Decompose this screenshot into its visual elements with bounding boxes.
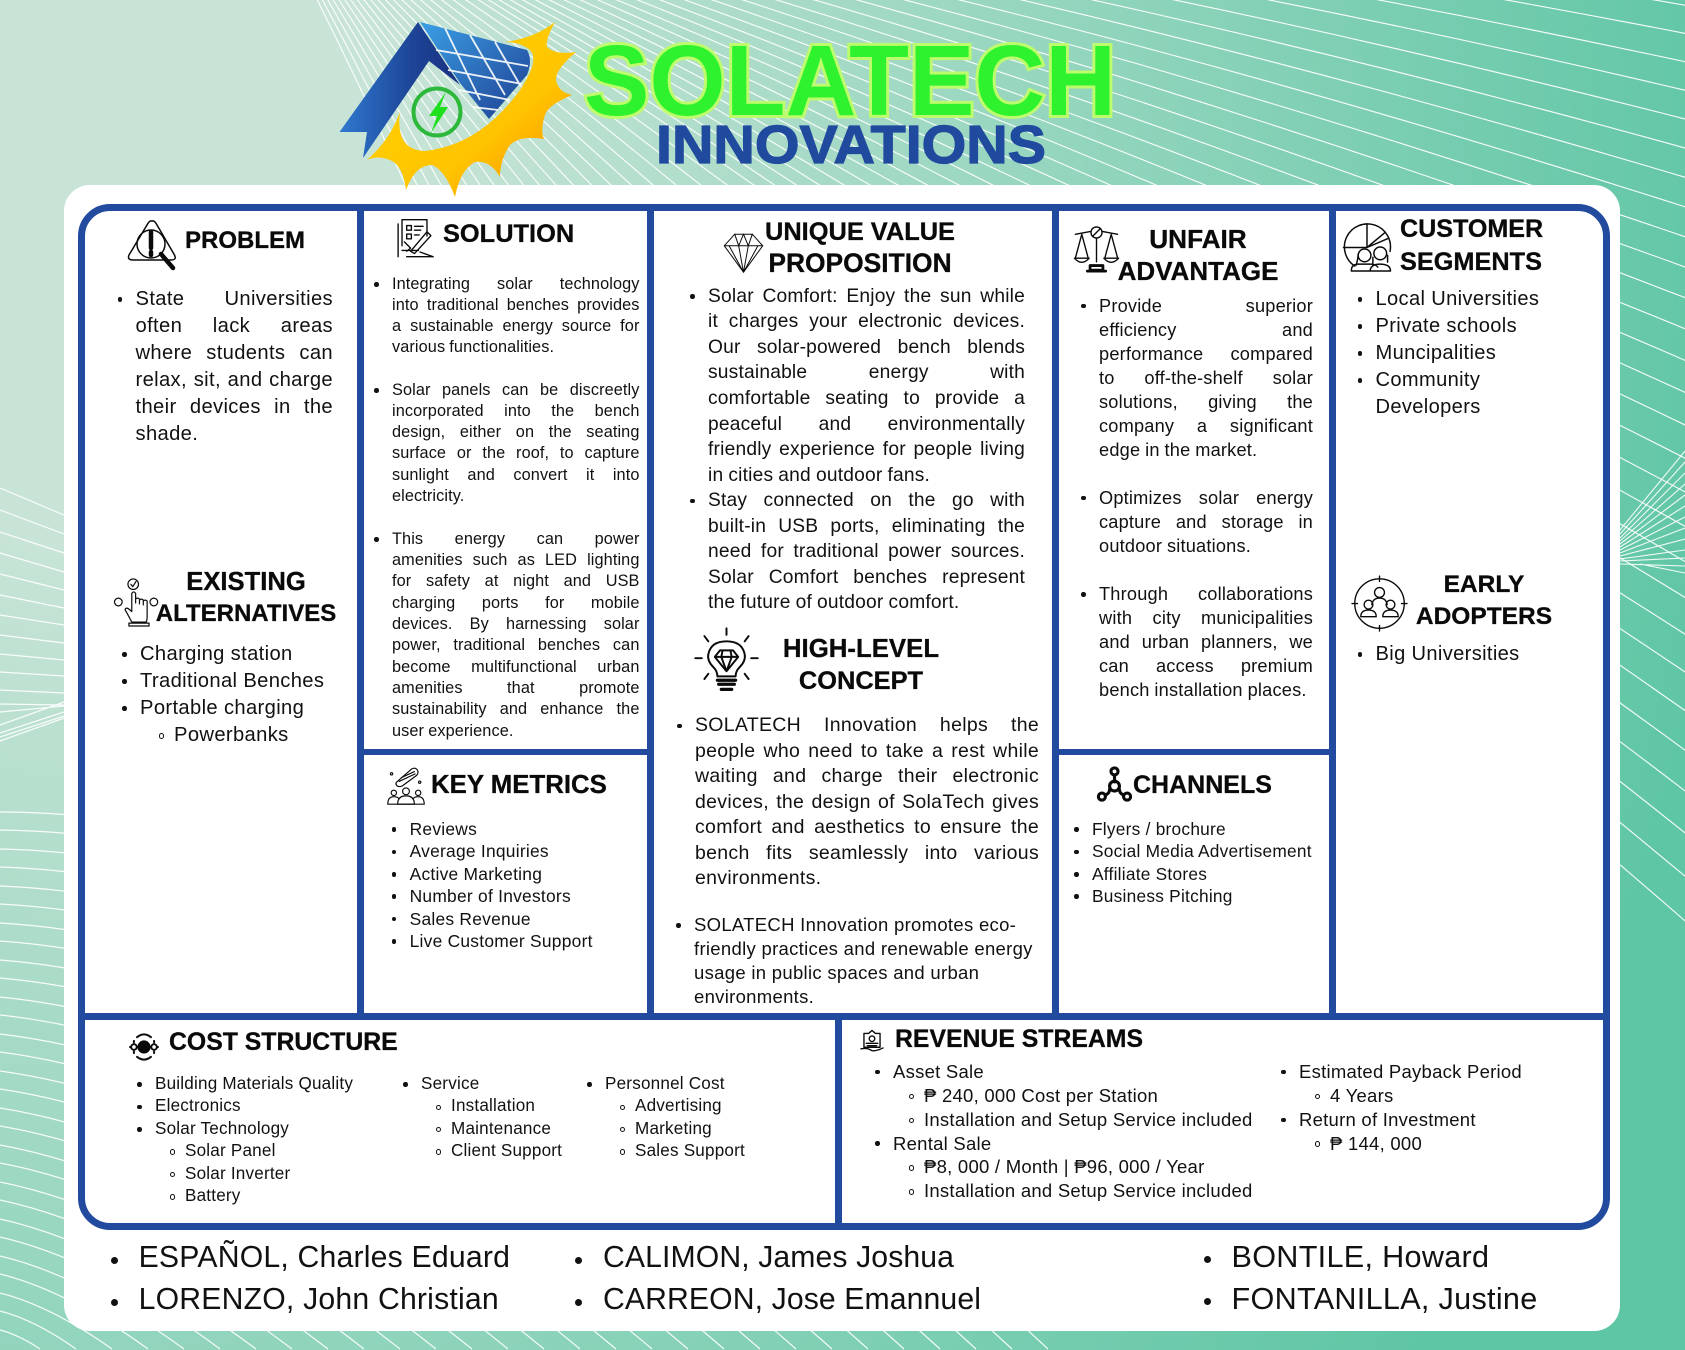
list [1358, 288, 1539, 418]
text block 1: solutions, giving the [1099, 392, 1313, 412]
panel: problem [118, 220, 333, 445]
list: Big Universities [1376, 643, 1520, 665]
list column 2: Maintenance [451, 1119, 551, 1138]
list column 1: Battery [185, 1186, 241, 1205]
panel: key metrics [387, 768, 607, 951]
icon: gears with dollar [129, 1033, 159, 1061]
text block 2: Solar panels can be discreetly [392, 380, 640, 398]
names column 1: ESPAÑOL, Charles Eduard [139, 1241, 510, 1274]
text block 3 [1081, 584, 1313, 700]
heading line 2: ADVANTAGE [1118, 256, 1278, 286]
list column 3: Personnel Cost [605, 1074, 725, 1093]
text block 3: user experience. [392, 722, 513, 740]
list: Local Universities [1376, 288, 1539, 310]
names column 3: BONTILE, Howard [1232, 1240, 1489, 1274]
names column 3: FONTANILLA, Justine [1232, 1282, 1538, 1316]
text block 2: Optimizes solar energy [1099, 488, 1313, 508]
text block 3: with city municipalities [1099, 608, 1313, 628]
text block 2 [374, 380, 640, 505]
list: Reviews [410, 819, 477, 839]
list: Developers [1376, 396, 1481, 418]
list right: 4 Years [1330, 1085, 1393, 1106]
text block 1: in cities and outdoor fans. [708, 465, 930, 486]
list: Business Pitching [1092, 886, 1233, 906]
heading: REVENUE STREAMS [895, 1026, 1143, 1053]
text block 2: outdoor situations. [1099, 536, 1251, 556]
text block 1: performance compared [1099, 344, 1313, 364]
heading: EARLY [1444, 570, 1524, 598]
text block 3: sustainability and enhance the [392, 700, 640, 718]
icon: light bulb with diamond [694, 627, 759, 691]
text block 3 [374, 530, 640, 740]
list: Flyers / brochure [1092, 819, 1226, 839]
text block 2: usage in public spaces and urban [694, 962, 979, 983]
list left: Asset Sale [893, 1061, 984, 1082]
text block 1: friendly experience for people living [708, 439, 1025, 460]
names column 2 [603, 1237, 981, 1321]
text block: their devices in the [136, 396, 333, 418]
text block 1: a sustainable energy source for [392, 317, 640, 335]
text block 2: built-in USB ports, eliminating the [708, 516, 1025, 537]
list: Number of Investors [410, 886, 571, 906]
list column 2 [421, 1073, 562, 1163]
list column 1: Solar Inverter [185, 1164, 290, 1183]
text block 3: power, traditional benches can [392, 636, 640, 654]
list column 1: Solar Panel [185, 1141, 276, 1160]
heading: PROBLEM [185, 227, 305, 254]
panel: existing alternatives [114, 568, 336, 746]
text block 3: bench installation places. [1099, 680, 1307, 700]
list left: Installation and Setup Service included [924, 1109, 1253, 1130]
heading: CHANNELS [1133, 770, 1272, 798]
panel: channels [1074, 766, 1312, 906]
text block 1 [677, 714, 1039, 889]
title: Solatech Innovations: INNOVATIONS [656, 115, 1046, 175]
list left: Installation and Setup Service included [924, 1180, 1253, 1201]
text block 2 [676, 914, 1033, 1007]
title: Solatech Innovations: SOLATECH [584, 25, 1116, 137]
text block 1: waiting and charge their electronic [695, 765, 1039, 787]
icon: checklist and pen [397, 219, 434, 258]
heading: UNFAIR [1149, 224, 1247, 254]
heading: SOLUTION [443, 220, 574, 248]
text block 1: devices, the design of SolaTech gives [695, 791, 1039, 813]
list left [893, 1060, 1253, 1203]
text block 1: Provide superior [1099, 296, 1313, 316]
panel: unique value proposition [690, 218, 1025, 613]
text block 3: amenities such as LED lighting [392, 551, 640, 569]
list column 1 [155, 1073, 353, 1207]
icon: pie chart with people [1342, 223, 1392, 272]
list [1074, 819, 1312, 906]
text block 3: charging ports for mobile [392, 594, 640, 612]
heading line 2: CONCEPT [799, 667, 923, 695]
text block 2: sunlight and convert it into [392, 466, 640, 484]
text block 2: Solar Comfort benches represent [708, 567, 1025, 588]
text block 1: Solar Comfort: Enjoy the sun while [708, 286, 1025, 307]
list left: ₱8, 000 / Month | ₱96, 000 / Year [924, 1156, 1204, 1177]
text block 3: amenities that promote [392, 679, 640, 697]
icon: chain and people [387, 768, 425, 805]
icon: pointing hand [114, 578, 158, 627]
text block: relax, sit, and charge [136, 369, 333, 391]
heading: HIGH-LEVEL [783, 635, 939, 663]
list [122, 643, 324, 746]
team member names [100, 1232, 1560, 1322]
names column 3 [1232, 1236, 1538, 1320]
text block: where students can [136, 342, 333, 364]
panel: revenue streams [842, 1020, 1603, 1223]
list: Community [1376, 369, 1480, 391]
list: Portable charging [140, 697, 304, 719]
text block 1: it charges your electronic devices. [708, 311, 1025, 332]
logo: solar roof and sun [340, 22, 576, 197]
text block 1: SOLATECH Innovation helps the [695, 714, 1039, 736]
white card [64, 185, 1620, 1331]
text block 1: edge in the market. [1099, 440, 1257, 460]
text block 3: and urban planners, we [1099, 632, 1313, 652]
text block 2: electricity. [392, 487, 464, 505]
text block 1: Integrating solar technology [392, 274, 640, 292]
icon: warning triangle with magnifier [128, 220, 176, 270]
text block 1: comfortable seating to provide a [708, 388, 1025, 409]
text block 2: design, either on the seating [392, 423, 640, 441]
list: Charging station [140, 643, 293, 665]
text block 2 [690, 490, 1025, 613]
panel: cost structure [129, 1029, 745, 1205]
text block 1: into traditional benches provides [392, 296, 640, 314]
list [392, 819, 593, 951]
text block 1 [1081, 296, 1313, 460]
list: Powerbanks [174, 724, 289, 746]
text block 1: bench fits seamlessly into various [695, 842, 1039, 864]
text block 3: Through collaborations [1099, 584, 1313, 604]
panel: high-level concept [676, 627, 1039, 1007]
canvas frame [78, 204, 1610, 1230]
text block 2: friendly practices and renewable energy [694, 938, 1033, 959]
text block 2: incorporated into the bench [392, 402, 640, 420]
text block 1: peaceful and environmentally [708, 414, 1025, 435]
heading: EXISTING [186, 568, 306, 596]
list column 2: Service [421, 1074, 479, 1093]
list column 2: Client Support [451, 1141, 562, 1160]
icon: network nodes [1096, 766, 1132, 802]
list: Average Inquiries [410, 841, 549, 861]
text block 1 [690, 286, 1025, 486]
text block 1: Our solar-powered bench blends [708, 337, 1025, 358]
heading: KEY METRICS [431, 770, 607, 798]
heading line 2: PROPOSITION [768, 248, 952, 278]
list: Live Customer Support [410, 931, 593, 951]
icon: revenue document in hand [860, 1030, 884, 1053]
text block 1: to off-the-shelf solar [1099, 368, 1313, 388]
text block 2: the future of outdoor comfort. [708, 592, 959, 613]
list left: ₱ 240, 000 Cost per Station [924, 1085, 1158, 1106]
list column 2: Installation [451, 1096, 535, 1115]
heading: COST STRUCTURE [169, 1029, 398, 1056]
text block 1: comfort and aesthetics to ensure the [695, 816, 1039, 838]
text block 2: capture and storage in [1099, 512, 1313, 532]
heading: UNIQUE VALUE [765, 218, 955, 246]
text block 1: environments. [695, 867, 821, 889]
text block 1: people who need to take a rest while [695, 740, 1039, 762]
text block 1: company a significant [1099, 416, 1313, 436]
text block 3: for safety at night and USB [392, 572, 640, 590]
list right [1299, 1060, 1522, 1155]
text block: State Universities [136, 288, 333, 310]
text block 2: surface or the roof, to capture [392, 444, 640, 462]
list: Traditional Benches [140, 670, 324, 692]
panel: unfair advantage [1074, 224, 1313, 700]
list column 1: Solar Technology [155, 1119, 289, 1138]
icon: diamond [724, 234, 764, 273]
names column 1: LORENZO, John Christian [139, 1283, 499, 1316]
panel: early adopters [1351, 570, 1552, 665]
heading: CUSTOMER [1400, 215, 1543, 243]
icon: balance scale [1074, 226, 1120, 272]
text block 1: efficiency and [1099, 320, 1313, 340]
list right: ₱ 144, 000 [1330, 1133, 1422, 1154]
heading line 2: ADOPTERS [1416, 603, 1552, 630]
text block 2: environments. [694, 986, 814, 1007]
list column 3: Sales Support [635, 1141, 745, 1160]
text block 3: This energy can power [392, 530, 640, 548]
text block [118, 288, 333, 445]
list right: Return of Investment [1299, 1109, 1476, 1130]
list: Active Marketing [410, 864, 542, 884]
panel: customer segments [1342, 215, 1543, 418]
list column 1: Electronics [155, 1096, 241, 1115]
list column 3 [605, 1073, 745, 1163]
list: Muncipalities [1376, 342, 1496, 364]
text block 3: devices. By harnessing solar [392, 615, 640, 633]
text block 3: can access premium [1099, 656, 1313, 676]
heading line 2: SEGMENTS [1400, 248, 1542, 276]
text block 2: SOLATECH Innovation promotes eco- [694, 914, 1016, 935]
heading line 2: ALTERNATIVES [156, 600, 336, 627]
list left: Rental Sale [893, 1133, 991, 1154]
list right: Estimated Payback Period [1299, 1061, 1522, 1082]
names column 2: CALIMON, James Joshua [603, 1241, 954, 1274]
list: Sales Revenue [410, 909, 531, 929]
list: Social Media Advertisement [1092, 841, 1312, 861]
panel: solution [374, 219, 640, 740]
text block 1: sustainable energy with [708, 362, 1025, 383]
list: Affiliate Stores [1092, 864, 1207, 884]
names column 1 [139, 1237, 510, 1321]
text block 3: become multifunctional urban [392, 658, 640, 676]
list column 3: Marketing [635, 1119, 712, 1138]
list column 3: Advertising [635, 1096, 722, 1115]
names column 2: CARREON, Jose Emannuel [603, 1283, 981, 1316]
list column 1: Building Materials Quality [155, 1074, 353, 1093]
icon: target with people [1351, 575, 1408, 632]
text block 1 [374, 274, 640, 356]
text block: shade. [136, 423, 198, 445]
text block 2: Stay connected on the go with [708, 490, 1025, 511]
text block 2: need for traditional power sources. [708, 541, 1025, 562]
text block: often lack areas [136, 315, 333, 337]
list: Private schools [1376, 315, 1517, 337]
text block 2 [1081, 488, 1313, 556]
text block 1: various functionalities. [392, 338, 554, 356]
